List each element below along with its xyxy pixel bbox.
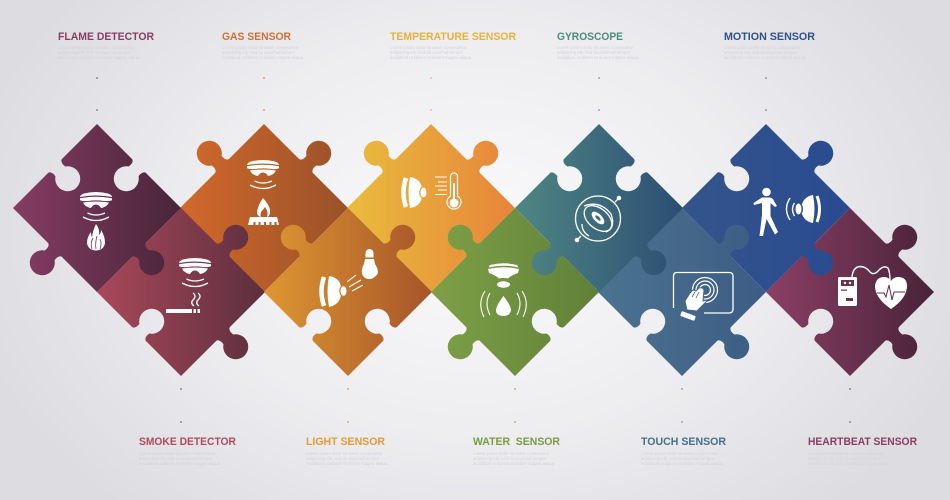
text block: gas sensor: Lorem ipsum dolor sit amet, consectetur [222, 45, 299, 50]
text block: water sensor: Lorem ipsum dolor sit amet, consectetur [473, 451, 550, 456]
panel: gas sensor puzzle piece [158, 81, 370, 292]
text block: motion sensor: Lorem ipsum dolor sit amet, consectetur [724, 45, 801, 50]
panel: temperature sensor puzzle piece [325, 81, 537, 292]
text block: smoke detector [139, 436, 236, 466]
text block: gyroscope: adipiscing elit, sed do eiusmod tempor [557, 50, 631, 55]
text block: water sensor: adipiscing elit, sed do eiusmod tempor [473, 456, 547, 461]
icon: light detector and bulb [322, 249, 378, 307]
panel: heartbeat sensor puzzle piece [766, 186, 950, 398]
text block: light sensor [306, 436, 388, 466]
panel: light sensor puzzle piece [242, 165, 454, 376]
panel: flame detector puzzle piece [0, 124, 203, 335]
text block: touch sensor: incididunt ut labore et dolore magna aliqua. [641, 461, 723, 466]
text block: flame detector: incididunt ut labore et dolore magna aliqua. [58, 55, 140, 60]
icon: water detector and drop [481, 263, 526, 317]
text block: temperature sensor: adipiscing elit, sed do eiusmod tempor [390, 50, 464, 55]
text block: flame detector: Lorem ipsum dolor sit amet, consectetur [58, 45, 135, 50]
text block: flame detector: adipiscing elit, sed do eiusmod tempor [58, 50, 132, 55]
panel: gyroscope puzzle piece [493, 124, 705, 335]
text block: temperature sensor [390, 31, 516, 60]
text block: flame detector: FLAME DETECTOR [58, 31, 154, 43]
text block: light sensor: Lorem ipsum dolor sit amet, consectetur [306, 451, 383, 456]
text block: gyroscope: incididunt ut labore et dolore magna aliqua. [557, 55, 639, 60]
text block: heartbeat sensor: incididunt ut labore et dolore magna aliqua. [808, 461, 890, 466]
text block: touch sensor [641, 436, 726, 466]
text block: temperature sensor: incididunt ut labore et dolore magna aliqua. [390, 55, 472, 60]
text block: gyroscope: Lorem ipsum dolor sit amet, consectetur [557, 45, 634, 50]
panel: water sensor puzzle piece [388, 186, 599, 398]
text block: light sensor: adipiscing elit, sed do eiusmod tempor [306, 456, 380, 461]
panel: motion sensor puzzle piece [682, 102, 893, 314]
text block: gas sensor: adipiscing elit, sed do eiusmod tempor [222, 50, 296, 55]
connector dots [96, 77, 851, 423]
text block: gas sensor: GAS SENSOR [222, 31, 291, 43]
text block: smoke detector: SMOKE DETECTOR [139, 436, 236, 448]
text block: heartbeat sensor [808, 436, 917, 466]
icon: touch screen with hand [674, 272, 733, 321]
text block: motion sensor: MOTION SENSOR [724, 31, 815, 43]
text block: water sensor [473, 436, 560, 466]
text block: water sensor: WATER SENSOR [473, 436, 560, 448]
text block: motion sensor: incididunt ut labore et dolore magna aliqua. [724, 55, 806, 60]
text block: temperature sensor: TEMPERATURE SENSOR [390, 31, 516, 43]
panel: smoke detector puzzle piece [97, 186, 308, 398]
text block: touch sensor: Lorem ipsum dolor sit amet, consectetur [641, 451, 718, 456]
icon: flame detector [80, 192, 112, 250]
text block: temperature sensor: Lorem ipsum dolor sit amet, consectetur [390, 45, 467, 50]
text block: light sensor: LIGHT SENSOR [306, 436, 385, 448]
text block: touch sensor: TOUCH SENSOR [641, 436, 726, 448]
icon: smoke detector [166, 258, 211, 313]
icon: temperature detector and thermometer [404, 173, 461, 209]
icon: gyroscope [575, 196, 621, 242]
text block: water sensor: incididunt ut labore et dolore magna aliqua. [473, 461, 555, 466]
text block: heartbeat sensor: adipiscing elit, sed do eiusmod tempor [808, 456, 882, 461]
text block: gyroscope: GYROSCOPE [557, 31, 623, 43]
text block: gas sensor [222, 31, 304, 60]
text block: gyroscope [557, 31, 639, 60]
icon: heart monitor and heart [838, 266, 907, 309]
text block: gas sensor: incididunt ut labore et dolore magna aliqua. [222, 55, 304, 60]
text block: smoke detector: incididunt ut labore et dolore magna aliqua. [139, 461, 221, 466]
text block: heartbeat sensor: HEARTBEAT SENSOR [808, 436, 917, 448]
text block: smoke detector: adipiscing elit, sed do eiusmod tempor [139, 456, 213, 461]
text block: motion sensor: adipiscing elit, sed do eiusmod tempor [724, 50, 798, 55]
icon: walking person and motion detector [754, 188, 820, 236]
text block: smoke detector: Lorem ipsum dolor sit amet, consectetur [139, 451, 216, 456]
panel: touch sensor puzzle piece [598, 186, 809, 398]
icon: gas detector [247, 160, 279, 225]
text block: heartbeat sensor: Lorem ipsum dolor sit amet, consectetur [808, 451, 885, 456]
text block: motion sensor [724, 31, 815, 60]
text block: touch sensor: adipiscing elit, sed do eiusmod tempor [641, 456, 715, 461]
text block: light sensor: incididunt ut labore et dolore magna aliqua. [306, 461, 388, 466]
text block: flame detector [58, 31, 154, 60]
